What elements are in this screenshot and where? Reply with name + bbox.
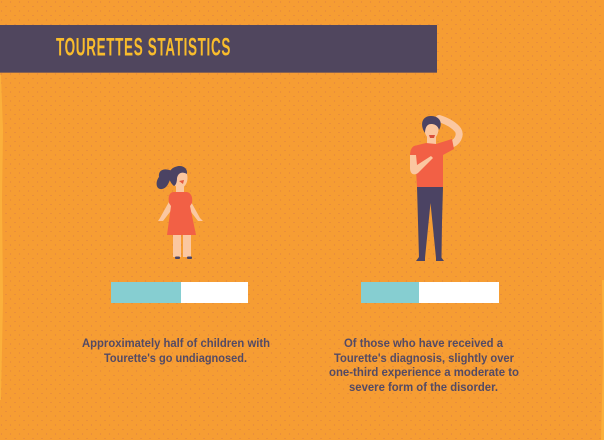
text block: diagnosis statistic: Tourette's diagnosis, slightly over xyxy=(334,351,514,365)
text block: children statistic xyxy=(82,336,270,365)
text block: diagnosis statistic: severe form of the disorder. xyxy=(349,380,498,394)
icon: man scratching head xyxy=(410,116,459,261)
text block: children statistic: Approximately half of children with xyxy=(82,336,270,350)
text block: diagnosis statistic: one-third experience a moderate to xyxy=(329,365,519,379)
text block: diagnosis statistic xyxy=(329,336,519,394)
bar chart: one-third of diagnosed xyxy=(361,282,499,303)
header banner xyxy=(0,25,437,73)
bar chart: half of children xyxy=(111,282,248,303)
text block: children statistic: Tourette's go undiagnosed. xyxy=(104,351,247,365)
text block: diagnosis statistic: Of those who have received a xyxy=(344,336,503,350)
title: TOURETTES STATISTICS xyxy=(56,34,231,62)
icon: girl in red dress xyxy=(157,166,203,259)
